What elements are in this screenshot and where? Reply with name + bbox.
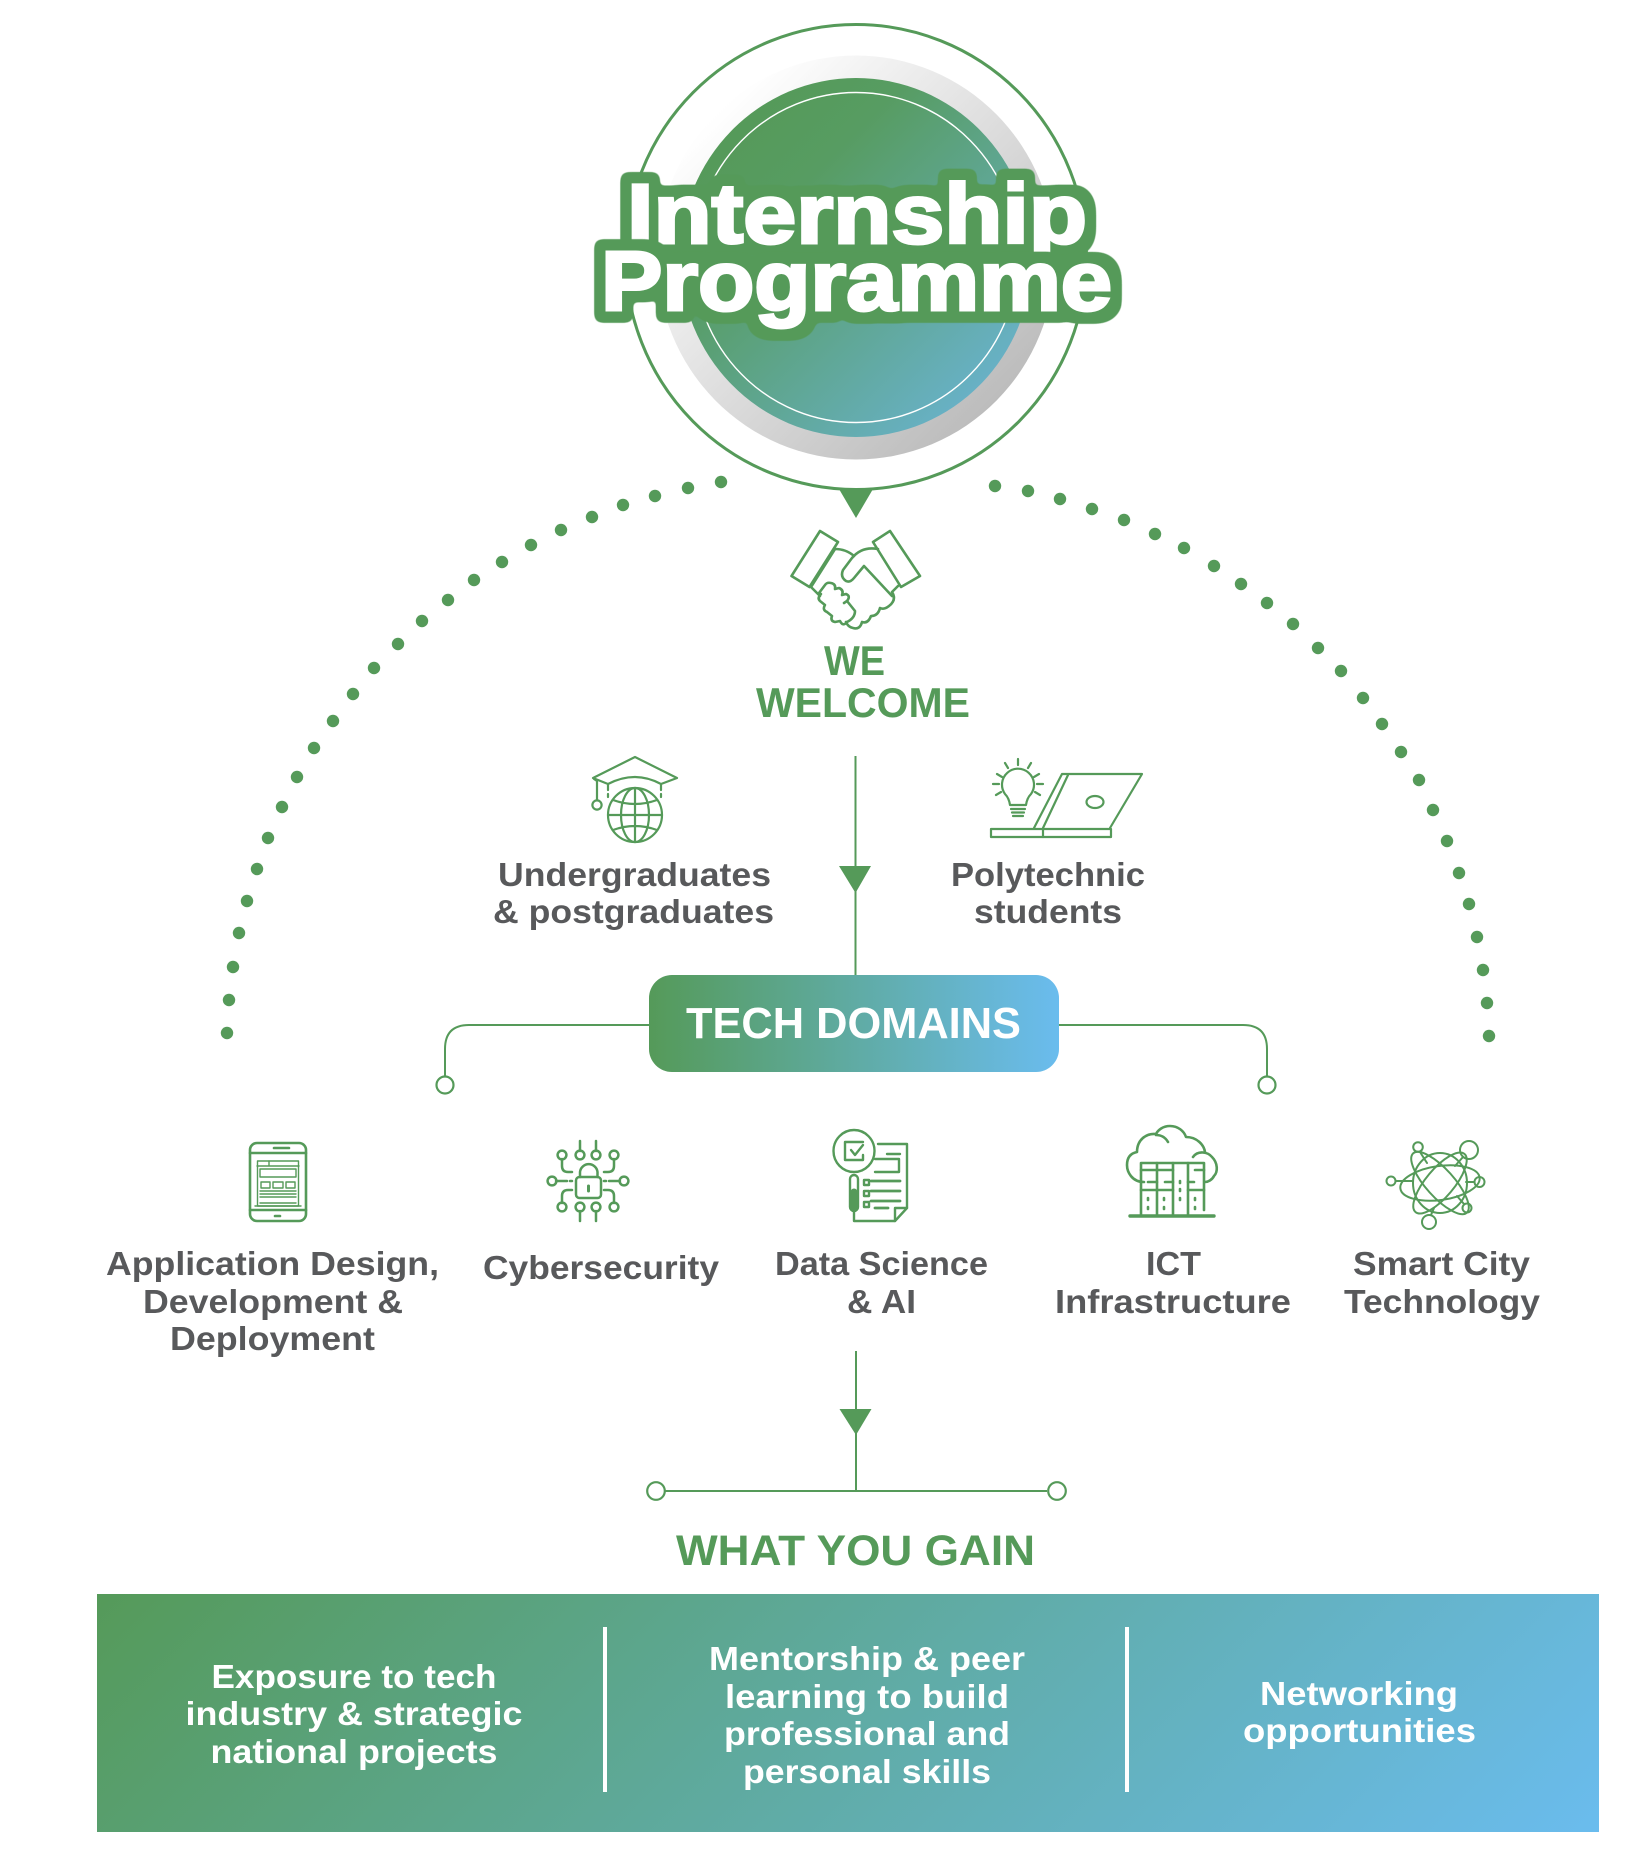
label: undergraduates: & postgraduates [493,893,774,930]
heading: what you gain: WHAT YOU GAIN [676,1527,1035,1575]
icon: ict cloud building [1127,1126,1217,1216]
icon: smart city network [1386,1141,1484,1229]
badge pointer arrow [839,489,873,518]
title line 1: Internship [627,167,1087,261]
benefit: networking [1243,1675,1476,1749]
label: smart city technology: Technology [1344,1283,1541,1320]
tech domains heading box: TECH DOMAINS [686,999,1021,1048]
heading: we welcome: WE [824,637,885,684]
label: ict infrastructure: ICT [1146,1245,1201,1282]
icon: graduation cap and globe [592,757,677,842]
label: data science and ai: & AI [847,1283,916,1320]
dotted arc: right [989,480,1495,1042]
icon: handshake [792,531,920,628]
benefit: mentorship [709,1640,1025,1790]
benefit: mentorship: professional and [724,1715,1010,1752]
label: undergraduates [493,856,774,930]
label: smart city technology: Smart City [1353,1245,1531,1282]
heading: we welcome: WELCOME [756,679,970,726]
label: cybersecurity: Cybersecurity [483,1249,720,1286]
label: undergraduates: Undergraduates [498,856,771,893]
heading: we welcome [756,637,970,726]
connector: tech domains left [436,1025,649,1094]
title badge [626,24,1086,490]
tech domains heading box [649,975,1059,1072]
icon: data science document [834,1130,907,1221]
benefit: networking: Networking [1260,1675,1458,1712]
benefit: mentorship: Mentorship & peer [709,1640,1025,1677]
benefit: mentorship: learning to build [725,1678,1009,1715]
benefit: industry exposure: national projects [210,1733,498,1770]
label: data science and ai: Data Science [775,1245,988,1282]
icon: cybersecurity lock [548,1141,628,1221]
panel: benefits banner [97,1594,1599,1832]
benefit: industry exposure: industry & strategic [186,1695,522,1732]
benefit: industry exposure [186,1658,522,1770]
label: application design: Application Design, [106,1245,439,1282]
benefit: mentorship: personal skills [743,1753,991,1790]
label: polytechnic students: students [974,893,1122,930]
arrow: welcome to tech domains [839,756,871,976]
benefit: networking: opportunities [1243,1712,1476,1749]
label: smart city technology [1344,1245,1541,1320]
label: application design [106,1245,439,1357]
benefit: industry exposure: Exposure to tech [212,1658,496,1695]
label: application design: Development & [143,1283,403,1320]
dotted arc: left [221,476,727,1039]
connector: tech domains right [1059,1025,1276,1094]
icon: tablet [250,1143,306,1221]
label: ict infrastructure [1055,1245,1291,1320]
label: application design: Deployment [170,1320,375,1357]
label: polytechnic students: Polytechnic [951,856,1145,893]
title line 2: Programme [601,234,1112,328]
label: polytechnic students [951,856,1145,930]
icon: light bulb and laptop [991,759,1142,837]
label: data science and ai [775,1245,988,1320]
arrow: domains to what you gain [647,1351,1066,1500]
label: ict infrastructure: Infrastructure [1055,1283,1291,1320]
